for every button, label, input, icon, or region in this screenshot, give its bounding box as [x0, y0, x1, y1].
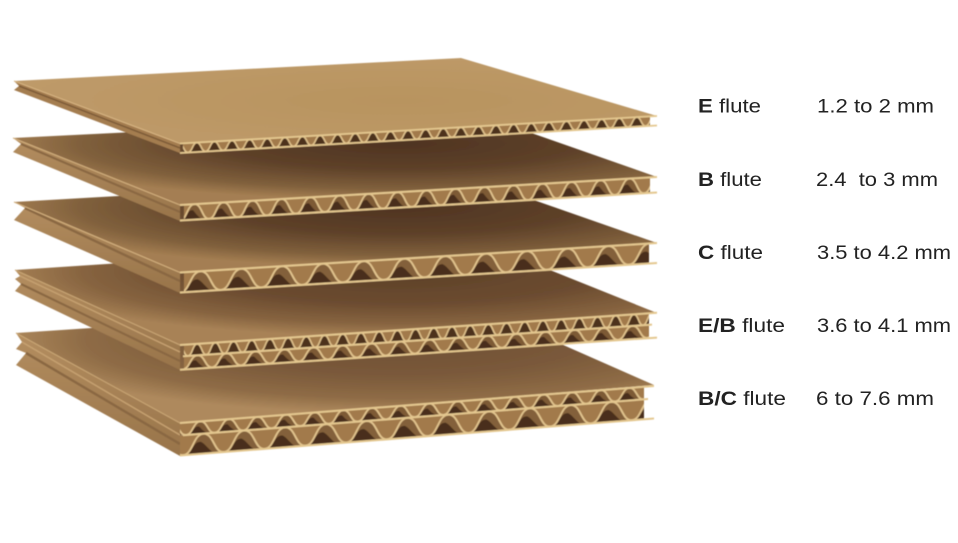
sheet: B/C flute: [16, 303, 654, 456]
row: C flute: 3.5 to 4.2 mm: [817, 242, 951, 264]
row: E/B flute: [698, 315, 951, 337]
row: B/C flute: [698, 388, 934, 410]
row: E flute: E flute: [698, 96, 761, 118]
row: B flute: 2.4 to 3 mm: [816, 169, 938, 191]
row: C flute: C flute: [698, 242, 763, 264]
corrugated board stack illustration: [13, 58, 657, 456]
row: B/C flute: B/C flute: [698, 388, 786, 410]
sheet: E/B flute: [15, 240, 657, 370]
sheet: C flute: [14, 176, 657, 293]
sheet: B flute: [13, 115, 657, 221]
row: E flute: 1.2 to 2 mm: [817, 96, 934, 118]
row: B flute: B flute: [698, 169, 762, 191]
row: E/B flute: 3.6 to 4.1 mm: [817, 315, 951, 337]
row: E flute: [698, 96, 934, 118]
row: C flute: [698, 242, 951, 264]
sheet: E flute: [14, 58, 657, 153]
row: B/C flute: 6 to 7.6 mm: [816, 388, 934, 410]
label table: flute types and thickness: [698, 96, 951, 410]
row: E/B flute: E/B flute: [698, 315, 785, 337]
row: B flute: [698, 169, 938, 191]
